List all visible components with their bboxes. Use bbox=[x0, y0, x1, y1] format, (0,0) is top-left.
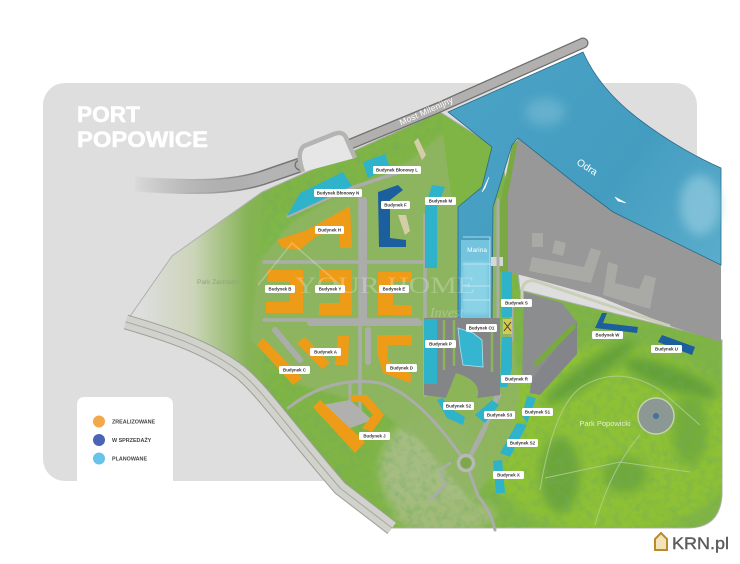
label D bbox=[386, 364, 417, 372]
label A: Budynek A bbox=[314, 350, 338, 355]
building S1 bbox=[522, 396, 536, 423]
building U bbox=[658, 335, 695, 355]
label S3: Budynek S3 bbox=[487, 413, 513, 418]
helipad circle bbox=[638, 398, 674, 434]
building S2 west bbox=[437, 398, 465, 425]
label S2 west: Budynek S2 bbox=[446, 404, 472, 409]
label L bbox=[373, 166, 421, 174]
legend item: realised: ZREALIZOWANE bbox=[112, 420, 156, 426]
label S2 west bbox=[443, 402, 474, 410]
label A bbox=[310, 348, 341, 356]
building labels bbox=[265, 166, 682, 479]
legend item: on sale: W SPRZEDAŻY bbox=[112, 437, 152, 444]
building S bbox=[502, 272, 512, 317]
watermark bbox=[258, 243, 475, 321]
label P: Budynek P bbox=[429, 342, 452, 347]
place labels: Odra bbox=[574, 157, 599, 179]
label N: Budynek Błonowy N bbox=[317, 191, 359, 196]
label R bbox=[501, 375, 532, 383]
park paths bbox=[540, 376, 700, 525]
building Blonowy N bbox=[287, 172, 352, 216]
building P bbox=[424, 319, 437, 384]
label H bbox=[315, 226, 344, 234]
label S1: Budynek S1 bbox=[525, 410, 551, 415]
buildings: on sale (blue) bbox=[378, 185, 695, 355]
land bbox=[126, 112, 722, 528]
building X bbox=[493, 460, 505, 493]
legend bbox=[77, 397, 173, 481]
label S bbox=[501, 299, 532, 307]
inner service road and lots bbox=[522, 281, 670, 395]
label S1 bbox=[522, 408, 553, 416]
title bbox=[77, 102, 208, 152]
building A bbox=[297, 336, 349, 369]
label P bbox=[425, 340, 456, 348]
label J: Budynek J bbox=[363, 434, 386, 439]
building M bbox=[425, 185, 445, 268]
diagonal railway and road bbox=[126, 322, 392, 528]
label N bbox=[314, 189, 362, 197]
map bbox=[126, 43, 740, 535]
label E: Budynek E bbox=[383, 287, 405, 292]
place labels: Park Popowicki bbox=[579, 419, 631, 428]
building S2 east bbox=[500, 423, 527, 457]
building H bbox=[277, 206, 352, 250]
harbour quay grey bbox=[507, 138, 721, 342]
label L: Budynek Błonowy L bbox=[376, 168, 418, 173]
label F bbox=[381, 201, 410, 209]
label X: Budynek X bbox=[497, 473, 520, 478]
label W: Budynek W bbox=[596, 333, 620, 338]
label S2 east bbox=[507, 439, 538, 447]
label S3 bbox=[484, 411, 515, 419]
bridge: Most Milenijny: Most Milenijny bbox=[398, 94, 455, 127]
building O1 bbox=[458, 328, 483, 367]
title: POPOWICE bbox=[77, 127, 208, 152]
road loop bbox=[300, 133, 355, 172]
watermark: YOUR HOME bbox=[295, 273, 475, 298]
label E bbox=[379, 285, 409, 293]
label Y: Budynek Y bbox=[319, 287, 341, 292]
label O1 bbox=[466, 324, 497, 332]
building Y bbox=[319, 270, 352, 315]
building D bbox=[377, 335, 412, 383]
building C bbox=[257, 338, 302, 385]
building J bbox=[313, 395, 384, 453]
street grid bbox=[264, 172, 512, 530]
icon: house bbox=[655, 533, 667, 550]
label H: Budynek H bbox=[318, 228, 341, 233]
main road fading left bbox=[135, 165, 300, 186]
buildings: planned (teal) bbox=[287, 154, 536, 493]
label W bbox=[592, 331, 623, 339]
label C: Budynek C bbox=[283, 368, 307, 373]
building B bbox=[266, 270, 303, 313]
building E bbox=[378, 272, 412, 315]
label R: Budynek R bbox=[505, 377, 529, 382]
title: PORT bbox=[77, 102, 141, 127]
park texture bbox=[260, 112, 740, 535]
label U bbox=[651, 345, 682, 353]
label S: Budynek S bbox=[505, 301, 528, 306]
building W bbox=[595, 313, 638, 333]
water: Odra and Marina bbox=[448, 52, 721, 320]
label F: Budynek F bbox=[384, 203, 407, 208]
buildings: realised (orange) bbox=[257, 206, 412, 453]
watermark: Invest bbox=[429, 306, 465, 321]
green tip by the harbour bbox=[442, 118, 492, 207]
building R bbox=[500, 337, 512, 387]
KRN logo: KRN.pl bbox=[672, 534, 729, 553]
urban base bbox=[250, 128, 520, 500]
label U: Budynek U bbox=[655, 347, 678, 352]
label X bbox=[493, 471, 524, 479]
KRN logo bbox=[655, 533, 729, 553]
label D: Budynek D bbox=[390, 366, 413, 371]
label B bbox=[265, 285, 295, 293]
panel: grey backdrop bbox=[43, 83, 697, 481]
legend item: planned: PLANOWANE bbox=[112, 456, 147, 462]
label M: Budynek M bbox=[429, 199, 453, 204]
building F bbox=[378, 185, 406, 247]
building ghost footprints on quay bbox=[529, 233, 656, 309]
place labels: Park Zachodni bbox=[197, 279, 239, 286]
label C bbox=[279, 366, 310, 374]
label M bbox=[425, 197, 456, 205]
label O1: Budynek O1 bbox=[469, 326, 495, 331]
building Blonowy L bbox=[363, 154, 390, 178]
label B: Budynek B bbox=[269, 287, 291, 292]
label Y bbox=[315, 285, 345, 293]
place labels: Marina bbox=[467, 247, 487, 254]
label S2 east: Budynek S2 bbox=[510, 441, 536, 446]
sandy courtyard bbox=[398, 138, 426, 235]
label J bbox=[359, 432, 390, 440]
place labels bbox=[197, 157, 631, 428]
bridge: Most Milenijny bbox=[300, 43, 583, 165]
building S3 bbox=[475, 400, 499, 423]
